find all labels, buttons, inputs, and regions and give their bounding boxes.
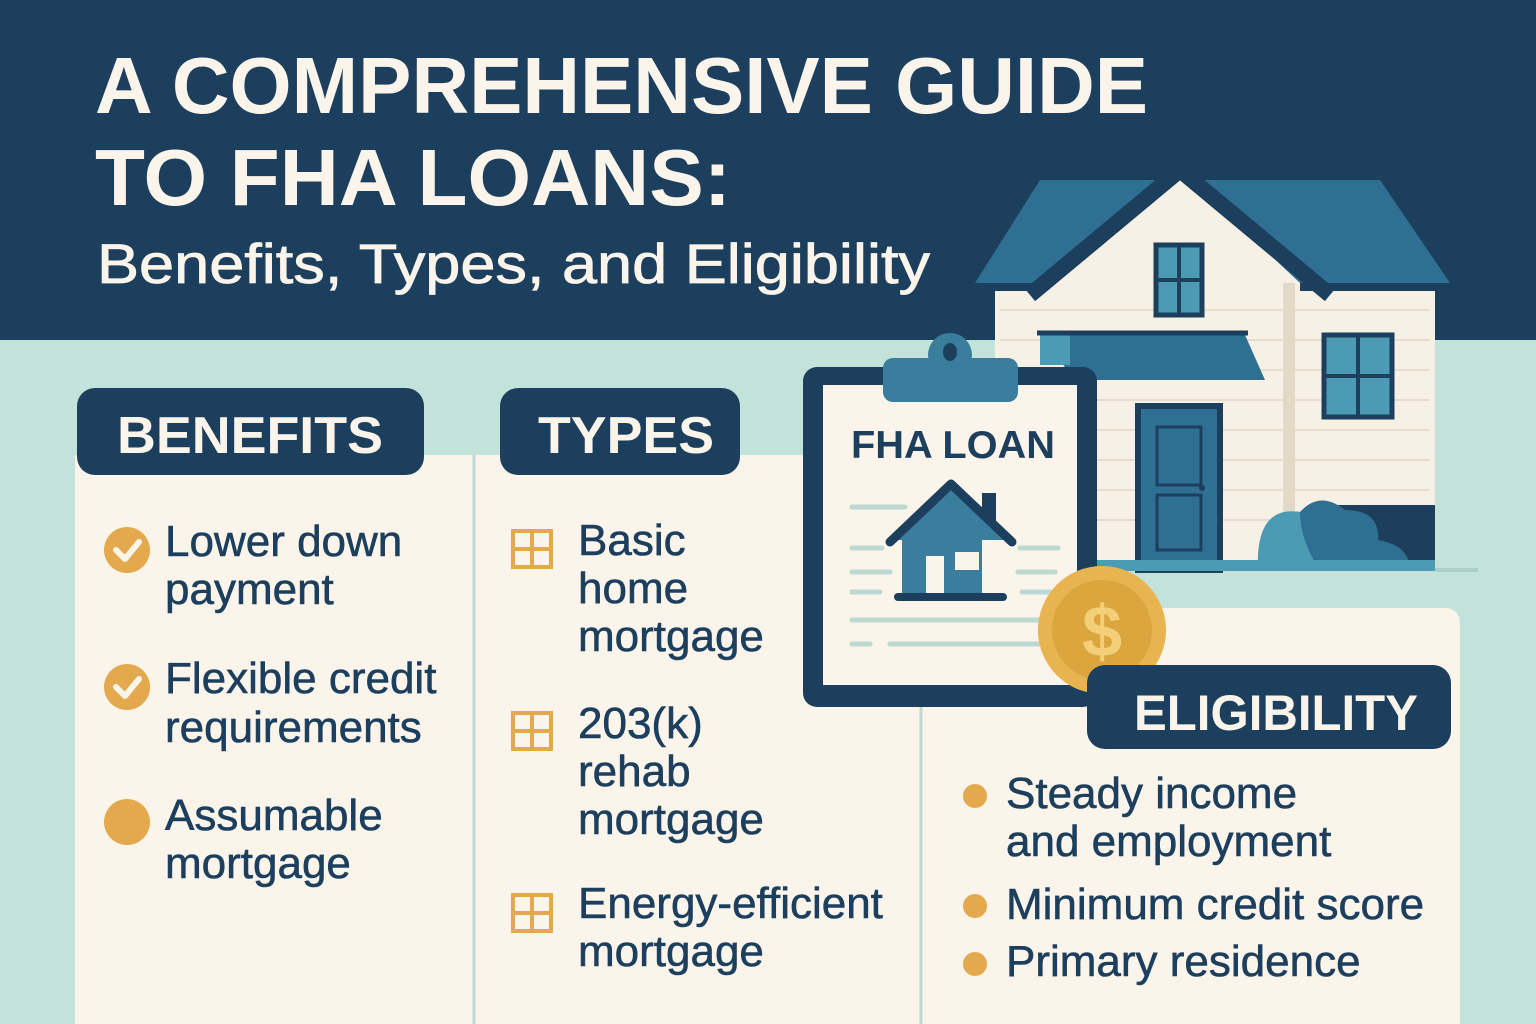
heading: types [500,388,740,475]
eligibility list: Primary residence [1006,937,1361,986]
main cream panel [75,455,1460,1024]
benefits list: payment [165,565,334,614]
title [95,41,1148,222]
title: A COMPREHENSIVE GUIDE [95,41,1148,130]
icon: coin [1038,566,1166,694]
types list: 203(k) [578,699,703,748]
types list: mortgage [578,795,764,844]
clipboard [803,333,1097,707]
types list: mortgage [578,927,764,976]
eligibility list: Minimum credit score [1006,880,1424,929]
types list: home [578,564,688,613]
icon: coin: $ [1082,592,1122,672]
benefits list: Assumable [165,791,383,840]
types list: Basic [578,516,686,565]
heading: benefits [77,388,424,475]
header band [0,0,1536,340]
heading: benefits: BENEFITS [117,407,383,465]
heading: types: TYPES [538,407,714,465]
types list: Energy-efficient [578,879,883,928]
types list [513,516,883,976]
icon: small house [890,484,1012,597]
benefits list: Flexible credit [165,654,436,703]
benefits list: mortgage [165,839,351,888]
types list: mortgage [578,612,764,661]
benefits list: requirements [165,703,422,752]
house illustration [975,170,1478,571]
types list: rehab [578,747,691,796]
benefits list [104,517,436,888]
heading: eligibility: ELIGIBILITY [1134,685,1418,741]
clipboard title: FHA LOAN [851,424,1055,467]
eligibility list: Steady income [1006,769,1297,818]
eligibility list: and employment [1006,817,1331,866]
heading: eligibility [1087,665,1451,749]
eligibility list [963,769,1424,986]
benefits list: Lower down [165,517,402,566]
subtitle: Benefits, Types, and Eligibility [97,232,930,295]
title: TO FHA LOANS: [95,133,731,222]
